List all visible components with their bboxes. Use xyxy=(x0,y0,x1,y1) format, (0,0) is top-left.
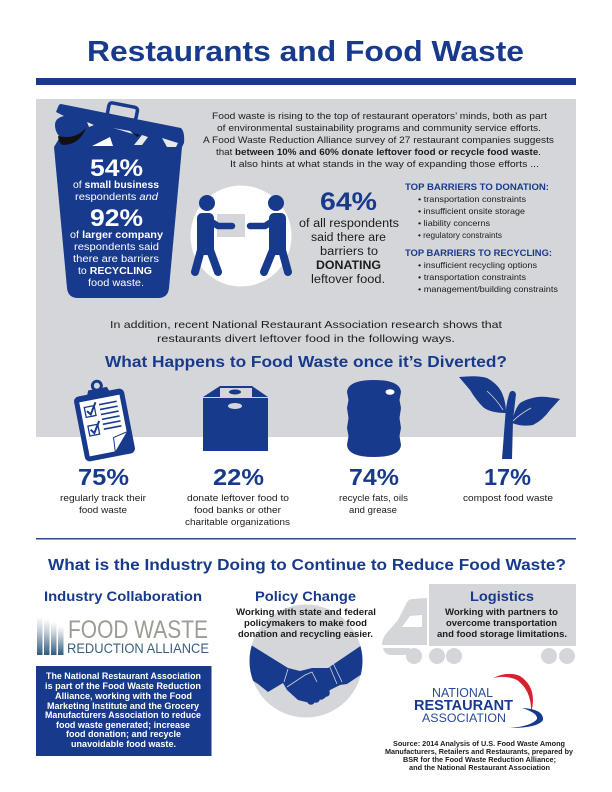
icon: overflowing trash bin with recycling stats xyxy=(54,102,184,298)
policy text xyxy=(236,607,376,640)
small business text: respondents and xyxy=(75,192,158,203)
source note: BSR for the Food Waste Reduction Alliance; xyxy=(403,755,556,764)
larger company text: of larger company xyxy=(70,230,163,241)
policy text: policymakers to make food xyxy=(244,618,367,629)
panel: gray background xyxy=(36,99,576,437)
intro text: that between 10% and 60% donate leftover food or recycle food waste . xyxy=(216,147,541,158)
icon: plant xyxy=(459,376,560,459)
stat: 22% xyxy=(185,464,291,527)
stat: 74%: recycle fats, oils xyxy=(339,493,409,503)
stat: 74%: 74% xyxy=(349,464,399,490)
64% stat block: said there are xyxy=(311,232,386,244)
source note xyxy=(385,739,574,772)
heading: industry: What is the Industry Doing to Continue to Reduce Food Waste? xyxy=(48,557,566,574)
stat: 75%: regularly track their xyxy=(60,493,146,503)
panel: alliance description: Marketing Institute and the Grocery xyxy=(47,701,199,711)
policy text: Working with state and federal xyxy=(236,607,376,618)
64% stat block xyxy=(299,188,399,286)
intro text: A Food Waste Reduction Alliance survey of 27 restaurant companies suggests xyxy=(203,135,554,146)
64% stat block: leftover food. xyxy=(311,274,385,286)
barriers to donation list xyxy=(405,182,549,240)
research intro text xyxy=(110,319,502,345)
stat: 22%: donate leftover food to xyxy=(187,493,289,503)
stat: 74%: and grease xyxy=(349,505,397,515)
stat: 22%: food banks or other xyxy=(194,505,281,515)
logistics text: and food storage limitations. xyxy=(437,629,567,640)
intro text: of environmental sustainability programs and community service efforts. xyxy=(217,123,541,134)
larger company text xyxy=(70,230,163,289)
panel: alliance description: food donation; and recycle xyxy=(66,729,181,739)
54% stat: 54% xyxy=(90,155,143,182)
stat: 75%: 75% xyxy=(78,464,129,490)
logo: Food Waste Reduction Alliance xyxy=(37,616,209,656)
heading: what happens: What Happens to Food Waste once it’s Diverted? xyxy=(105,354,507,371)
intro text xyxy=(203,111,554,170)
logistics text: Working with partners to xyxy=(445,607,558,618)
source note: and the National Restaurant Association xyxy=(409,763,550,772)
title: Restaurants and Food Waste xyxy=(87,36,524,68)
barriers to recycling list: • transportation constraints xyxy=(418,272,526,282)
larger company text: respondents said xyxy=(74,242,159,253)
panel: alliance description: The National Restaurant Association xyxy=(46,671,201,681)
stat: 74% xyxy=(339,464,409,515)
barriers to recycling list: • insufficient recycling options xyxy=(418,260,537,270)
heading: industry collaboration: Industry Collaboration xyxy=(44,588,202,604)
research intro text: restaurants divert leftover food in the following ways. xyxy=(157,333,455,345)
barriers to donation list: • insufficient onsite storage xyxy=(418,206,525,216)
intro text: Food waste is rising to the top of restaurant operators’ minds, both as part xyxy=(212,111,547,122)
64% stat block: 64% xyxy=(320,188,377,216)
research intro text: In addition, recent National Restaurant Association research shows that xyxy=(110,319,502,331)
heading: logistics: Logistics xyxy=(470,588,534,604)
icon: handshake xyxy=(250,604,362,718)
intro text: It also hints at what stands in the way of expanding those efforts ... xyxy=(230,159,539,170)
panel: alliance description: Alliance, working with the Food xyxy=(55,691,192,701)
64% stat block: of all respondents xyxy=(299,218,399,230)
source note: Manufacturers, Retailers and Restaurants, prepared by xyxy=(385,747,574,756)
stat: 75%: food waste xyxy=(79,505,127,515)
logistics text: overcome transportation xyxy=(446,618,557,629)
barriers to recycling list: TOP BARRIERS TO RECYCLING: xyxy=(405,248,552,258)
stat: 17%: 17% xyxy=(484,464,531,490)
panel: alliance description: is part of the Food Waste Reduction xyxy=(45,681,201,691)
barriers to recycling list xyxy=(405,248,558,294)
64% stat block: DONATING xyxy=(316,260,381,272)
larger company text: there are barriers xyxy=(73,254,159,265)
stat: 17% xyxy=(463,464,553,503)
logo: National Restaurant Association xyxy=(414,674,543,728)
icon: donation box xyxy=(203,386,268,451)
92% stat: 92% xyxy=(90,205,143,232)
barriers to donation list: • liability concerns xyxy=(418,218,490,228)
icon: oil barrel xyxy=(347,380,401,457)
logo: Food Waste Reduction Alliance: REDUCTION ALLIANCE xyxy=(67,640,209,656)
icon: clipboard xyxy=(71,375,136,462)
title rule xyxy=(36,78,576,85)
64% stat block: barriers to xyxy=(320,246,378,258)
larger company text: food waste. xyxy=(88,278,144,289)
panel: alliance description: Manufacturers Association to reduce xyxy=(45,710,201,720)
logo: National Restaurant Association: ASSOCIATION xyxy=(422,711,506,725)
stat: 17%: compost food waste xyxy=(463,493,553,503)
small business text: of small business xyxy=(73,180,159,191)
panel: alliance description: unavoidable food waste. xyxy=(71,739,176,749)
stat: 22%: 22% xyxy=(213,464,264,490)
source note: Source: 2014 Analysis of U.S. Food Waste Among xyxy=(393,739,565,748)
larger company text: to RECYCLING xyxy=(78,266,152,277)
small business text xyxy=(73,180,159,203)
barriers to recycling list: • management/building constraints xyxy=(418,284,558,294)
barriers to donation list: • regulatory constraints xyxy=(418,230,502,240)
icon: two people handing over a box xyxy=(190,186,292,286)
panel: alliance description xyxy=(36,666,212,756)
heading: policy change: Policy Change xyxy=(255,588,356,604)
barriers to donation list: TOP BARRIERS TO DONATION: xyxy=(405,182,549,192)
panel: alliance description: food waste generated; increase xyxy=(56,720,190,730)
stat: 75% xyxy=(60,464,146,515)
logo: Food Waste Reduction Alliance: FOOD WASTE xyxy=(68,616,208,644)
logo: National Restaurant Association: RESTAURANT xyxy=(414,697,513,714)
barriers to donation list: • transportation constraints xyxy=(418,194,526,204)
stat: 22%: charitable organizations xyxy=(185,517,291,527)
logistics text xyxy=(437,607,567,640)
icon: truck xyxy=(382,584,576,664)
logo: National Restaurant Association: NATIONAL xyxy=(432,685,493,700)
policy text: donation and recycling easier. xyxy=(238,629,373,640)
